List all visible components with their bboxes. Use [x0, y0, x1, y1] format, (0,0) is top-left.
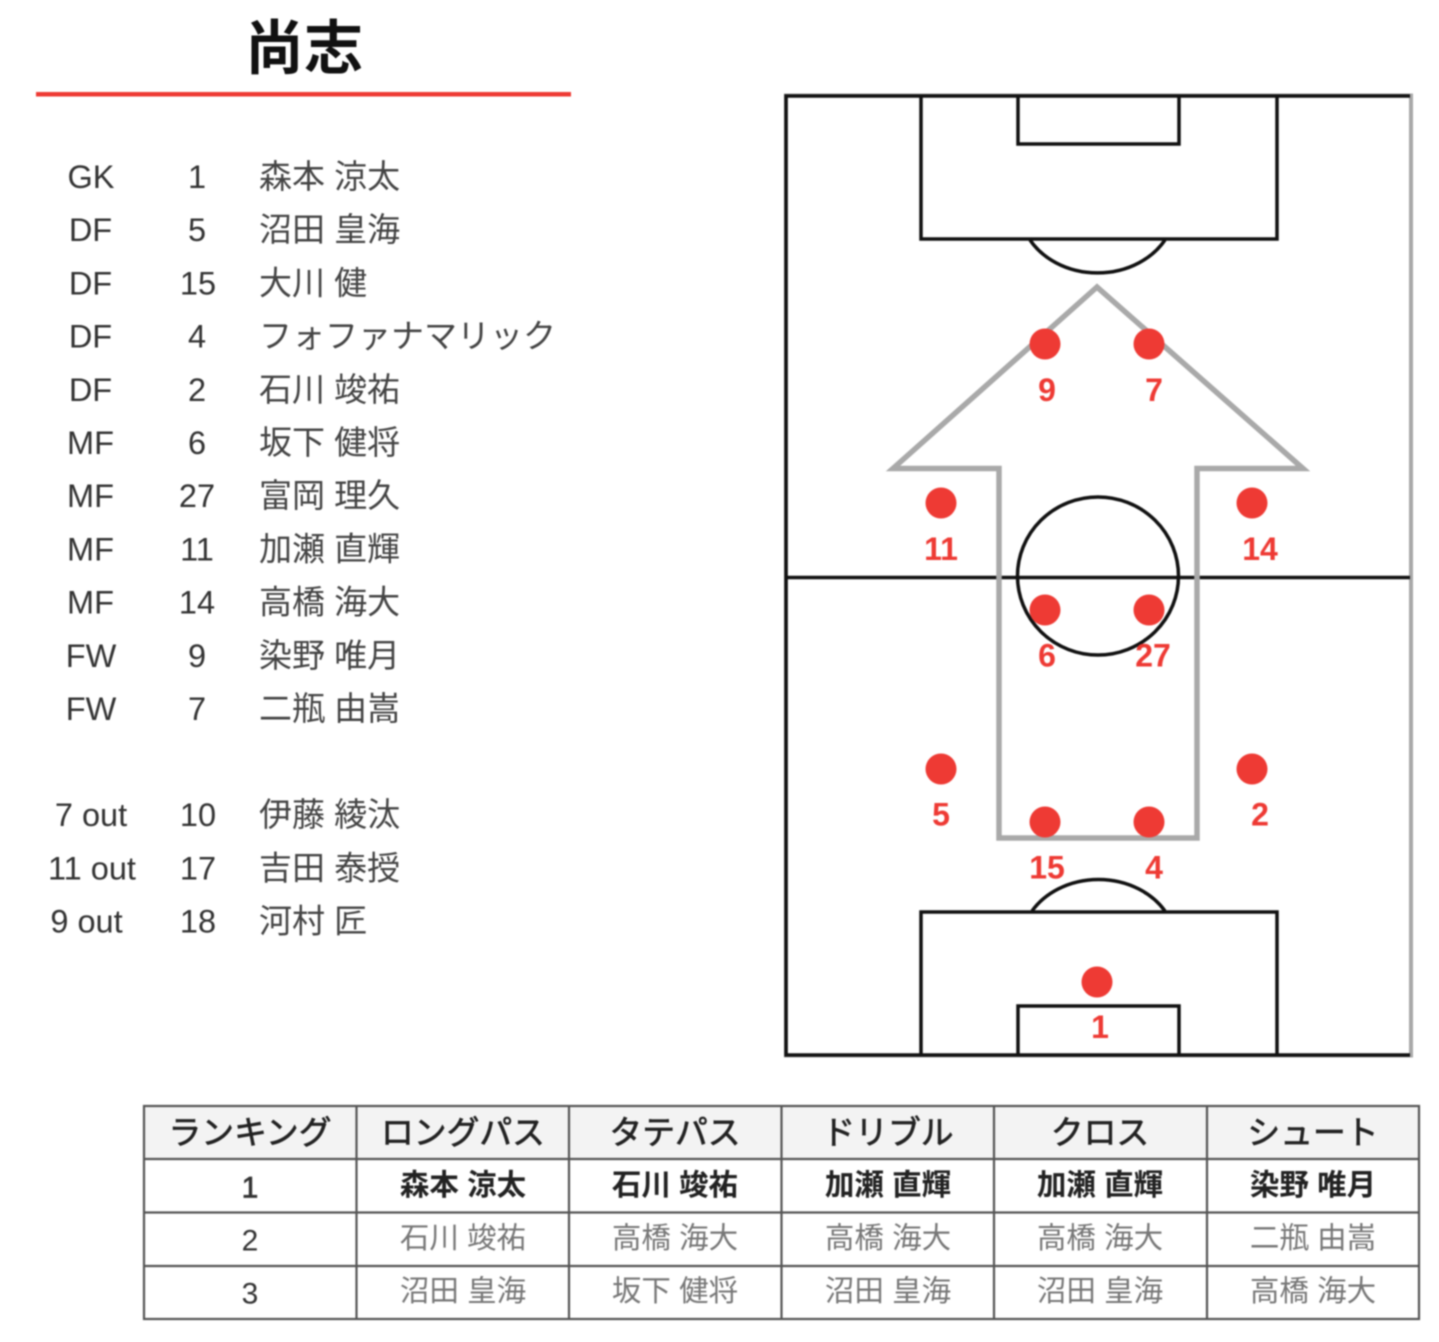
lineup row: FW 7: 二瓶 由嵩 — [259, 690, 400, 727]
lineup row: MF 14: MF — [67, 584, 114, 620]
table header row — [168, 1114, 1379, 1151]
player numbers: 15 — [1029, 850, 1065, 886]
substitute row: 11 out: 11 out — [48, 850, 136, 886]
lineup row: DF 2: DF — [69, 372, 112, 408]
table header background — [144, 1106, 1419, 1159]
lineup row: DF 5: 5 — [188, 212, 206, 248]
substitute row: 9 out — [50, 902, 367, 940]
lineup row: DF 15: 大川 健 — [259, 264, 367, 302]
substitute row: 7 out: 伊藤 綾汰 — [259, 796, 400, 833]
player numbers — [924, 372, 1278, 1045]
lineup row: MF 27: 富岡 理久 — [259, 477, 400, 514]
player numbers: 9 — [1038, 372, 1056, 408]
lineup row: GK 1 — [68, 158, 400, 195]
panel: starting lineup list — [66, 158, 556, 727]
lineup row: GK 1: GK — [68, 159, 115, 195]
lineup row: DF 2: 石川 竣祐 — [259, 371, 400, 408]
lineup row: FW 7: FW — [66, 691, 117, 727]
player numbers: 5 — [932, 796, 950, 832]
table row: rank 2: 2 — [242, 1224, 258, 1258]
table grid — [144, 1106, 1419, 1319]
lineup row: DF 4: 4 — [188, 318, 206, 354]
table row: rank 1: 石川 竣祐 — [612, 1169, 738, 1202]
table row: rank 3: 坂下 健将 — [612, 1275, 738, 1308]
substitute row: 9 out: 9 out — [50, 904, 123, 940]
lineup row: DF 4 — [69, 318, 556, 354]
lineup row: MF 27: 27 — [179, 478, 215, 514]
substitute row: 11 out: 吉田 泰授 — [259, 850, 400, 886]
player numbers: 4 — [1145, 850, 1163, 886]
pitch markings — [786, 96, 1411, 1056]
table row: rank 3: 沼田 皇海 — [825, 1275, 951, 1308]
table row: rank 2: 高橋 海大 — [612, 1222, 738, 1255]
lineup row: GK 1: 1 — [188, 159, 206, 195]
table row: rank 3: 3 — [242, 1278, 258, 1310]
table header row: タテパス — [609, 1114, 741, 1151]
lineup row: FW 9: FW — [66, 638, 117, 674]
title: 尚志 — [245, 16, 363, 82]
player numbers: 1 — [1091, 1009, 1109, 1045]
table row: rank 1: 加瀬 直輝 — [825, 1169, 951, 1202]
panel: ranking table — [144, 1106, 1419, 1319]
lineup row: MF 6 — [67, 424, 400, 461]
table row: rank 2: 石川 竣祐 — [400, 1222, 526, 1255]
substitute row: 7 out: 10 — [180, 797, 216, 833]
lineup row: DF 15 — [69, 264, 367, 302]
lineup row: MF 11 — [67, 530, 400, 568]
table row: rank 3: 沼田 皇海 — [1037, 1275, 1163, 1308]
substitute row: 9 out: 18 — [180, 904, 216, 940]
lineup row: FW 9 — [66, 637, 400, 674]
table row: rank 2: 高橋 海大 — [1037, 1222, 1163, 1255]
substitute row: 9 out: 河村 匠 — [259, 902, 367, 940]
table header row: ロングパス — [381, 1114, 545, 1151]
lineup row: DF 4: DF — [69, 318, 112, 354]
table row: rank 1: 1 — [242, 1172, 258, 1204]
player numbers: 6 — [1038, 638, 1056, 674]
player numbers: 7 — [1145, 372, 1163, 408]
table row: rank 1: 森本 涼太 — [400, 1169, 526, 1202]
player numbers: 14 — [1242, 531, 1278, 567]
lineup row: MF 14 — [67, 584, 400, 620]
lineup row: DF 5: DF — [69, 212, 112, 248]
table row: rank 2: 高橋 海大 — [825, 1222, 951, 1255]
table header row: シュート — [1247, 1114, 1379, 1151]
lineup row: FW 9: 染野 唯月 — [259, 637, 400, 674]
table row: rank 3: 高橋 海大 — [1250, 1275, 1376, 1308]
table header row: ドリブル — [822, 1114, 954, 1151]
lineup row: MF 11: 11 — [180, 532, 214, 568]
player markers — [926, 328, 1268, 998]
lineup row: MF 11: MF — [67, 532, 114, 568]
table row: rank 1: 加瀬 直輝 — [1037, 1169, 1163, 1202]
panel: substitutes list — [48, 796, 400, 940]
lineup row: DF 15: 15 — [180, 266, 216, 302]
lineup row: GK 1: 森本 涼太 — [259, 158, 400, 195]
lineup row: DF 2 — [69, 371, 400, 408]
table row: rank 3: 沼田 皇海 — [400, 1275, 526, 1308]
lineup row: MF 27 — [67, 477, 400, 514]
lineup row: MF 6: 坂下 健将 — [259, 424, 400, 461]
lineup row: MF 27: MF — [67, 478, 114, 514]
table row: rank 1: 染野 唯月 — [1250, 1169, 1376, 1202]
lineup row: MF 14: 高橋 海大 — [259, 584, 400, 620]
table header row: クロス — [1051, 1114, 1149, 1151]
lineup row: FW 7 — [66, 690, 400, 727]
arrow: attacking direction — [893, 287, 1303, 838]
lineup row: DF 4: フォファナマリック — [259, 318, 556, 354]
player numbers: 2 — [1251, 796, 1269, 832]
lineup row: FW 9: 9 — [188, 638, 206, 674]
table header row: ランキング — [168, 1114, 332, 1151]
lineup row: DF 2: 2 — [188, 372, 206, 408]
table row: rank 2: 二瓶 由嵩 — [1250, 1222, 1376, 1255]
lineup row: MF 14: 14 — [179, 584, 215, 620]
table row: rank 2 — [242, 1222, 1376, 1258]
lineup row: DF 5: 沼田 皇海 — [259, 211, 400, 248]
lineup row: MF 11: 加瀬 直輝 — [259, 530, 400, 568]
substitute row: 7 out: 7 out — [55, 797, 127, 833]
substitute row: 11 out: 17 — [180, 850, 216, 886]
player numbers: 27 — [1135, 638, 1171, 674]
title underline — [36, 92, 571, 96]
substitute row: 11 out — [48, 850, 400, 886]
panel: pitch formation — [786, 96, 1411, 1056]
lineup row: MF 6: 6 — [188, 425, 206, 461]
lineup row: FW 7: 7 — [188, 691, 206, 727]
lineup row: DF 15: DF — [69, 266, 112, 302]
player numbers: 11 — [924, 531, 958, 567]
lineup row: MF 6: MF — [67, 425, 114, 461]
lineup row: DF 5 — [69, 211, 400, 248]
table row: rank 3 — [242, 1275, 1376, 1310]
table row: rank 1 — [242, 1169, 1376, 1204]
substitute row: 7 out — [55, 796, 400, 833]
